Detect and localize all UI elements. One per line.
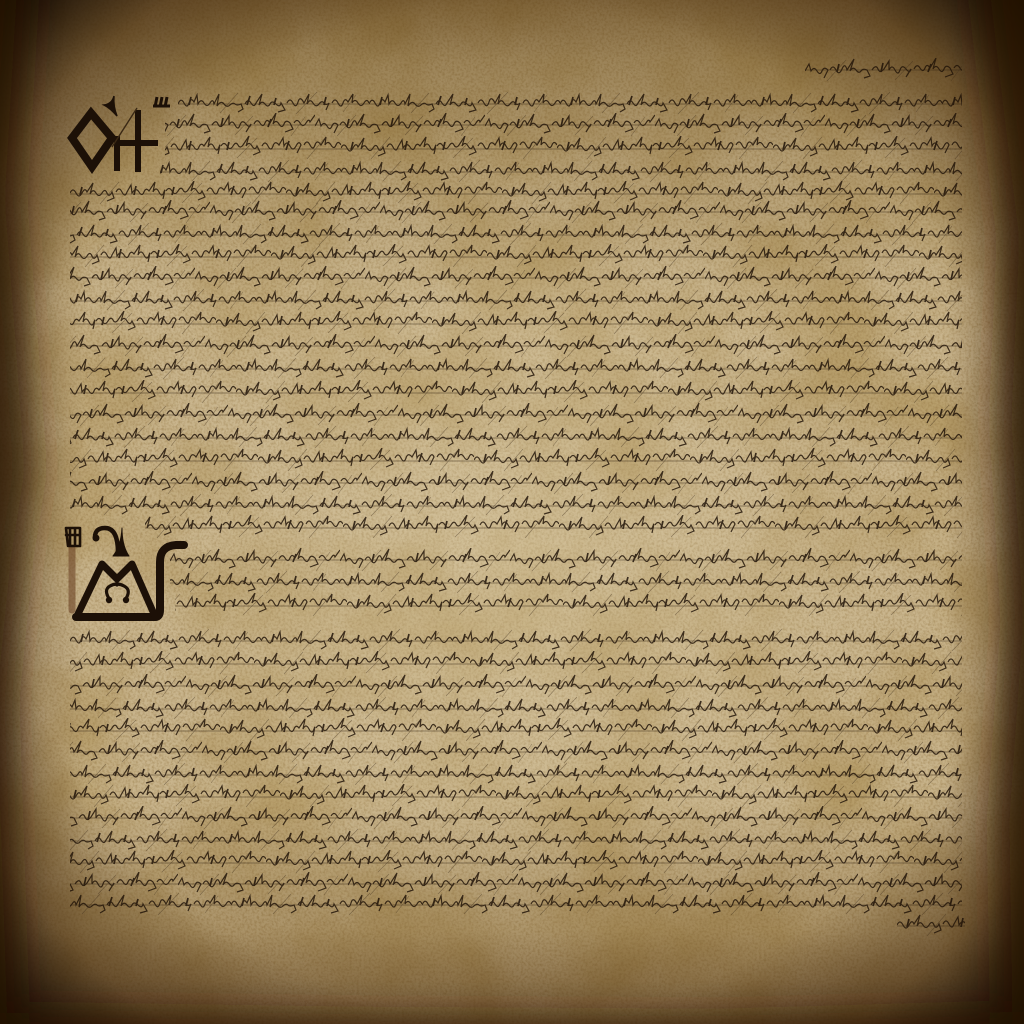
- heading line, top right: [805, 58, 962, 82]
- emblem: diamond and H sigil: [72, 96, 170, 172]
- emblem: mountain, omega and hook: [66, 528, 184, 617]
- script block two, beside the emblem: [170, 548, 962, 617]
- script block one: [70, 91, 962, 539]
- closing line, bottom right: [897, 913, 965, 937]
- script block three: [70, 628, 962, 916]
